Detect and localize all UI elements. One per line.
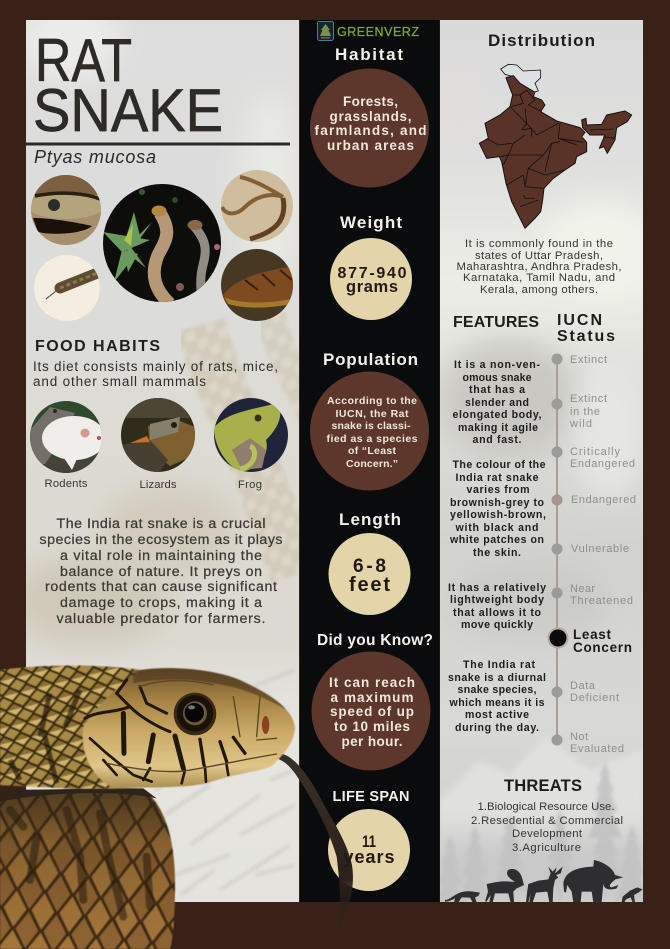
text: feature 2: varies from	[466, 484, 530, 496]
text: feature 4: which means it is	[448, 697, 545, 709]
text: feature 4: snake is a diurnal	[448, 672, 546, 684]
chart: IUCN status timeline: wild	[569, 418, 592, 430]
text: feature 4: snake species,	[458, 684, 537, 696]
head and neck	[0, 666, 295, 789]
text: diet description	[33, 359, 278, 389]
heading: food habits: FOOD HABITS	[35, 338, 160, 355]
photo: frog	[214, 398, 288, 472]
stat: habitat circle	[310, 68, 429, 188]
photo: lizard	[121, 398, 195, 472]
heading: IUCN status: IUCN	[557, 312, 602, 329]
map: state borders	[487, 90, 615, 207]
chart: IUCN status timeline: Near	[570, 583, 595, 595]
stat: population circle: snake is classi-	[332, 420, 411, 432]
text: feature 2: The colour of the	[452, 459, 546, 471]
text: distribution description: states of Uttar Pradesh,	[475, 250, 603, 262]
stat: habitat circle: farmlands, and	[314, 123, 426, 138]
head scale markings	[85, 680, 277, 783]
stat: did you know circle: speed of up	[330, 704, 414, 719]
text: feature 1: elongated body,	[452, 409, 542, 421]
title: SNAKE	[33, 77, 223, 144]
map region: unshaded north	[501, 64, 541, 92]
title: RAT	[35, 27, 132, 94]
text: feature 3: move quickly	[461, 619, 533, 631]
heading: features: FEATURES	[453, 314, 539, 331]
subtitle: scientific name: Ptyas mucosa	[34, 147, 156, 167]
icon: deer	[526, 867, 563, 902]
text: feature 1: making it agile	[458, 422, 538, 434]
map region: north-east states	[582, 111, 632, 153]
text: ecosystem role paragraph: valuable predator for farmers.	[56, 611, 266, 627]
text: feature 4: The India rat	[463, 659, 535, 671]
text: ecosystem role paragraph: a vital role in maintaining the	[60, 548, 262, 564]
text: diet description: and other small mammals	[33, 374, 206, 389]
text: feature 4	[448, 659, 546, 734]
stat: habitat circle: Forests,	[343, 94, 398, 109]
text: ecosystem role paragraph: The India rat snake is a crucial	[56, 516, 266, 532]
chart: IUCN status timeline: Extinct	[570, 393, 607, 405]
text: ecosystem role paragraph: damage to crops, making it a	[60, 595, 262, 611]
chart: IUCN status timeline: Critically	[570, 446, 620, 458]
text: distribution description: Kerala, among others.	[480, 284, 598, 296]
text: life span value: 11	[362, 832, 376, 851]
coiled body	[0, 787, 175, 949]
photo: snake on rock	[221, 170, 293, 242]
chart: IUCN status timeline: Deficient	[570, 692, 619, 704]
chart: IUCN status timeline: Not	[570, 731, 588, 743]
stat: habitat circle: urban areas	[327, 138, 414, 153]
photo: rodents	[30, 401, 106, 473]
text: feature 2: white patches on	[449, 534, 544, 546]
heading: IUCN status	[557, 312, 615, 345]
stat: length circle: 6-8	[353, 556, 386, 577]
stat: weight circle: grams	[346, 278, 398, 296]
text: feature 1: slender and	[465, 397, 529, 409]
text: feature 3: It has a relatively	[448, 582, 546, 594]
text: ecosystem role paragraph	[40, 516, 282, 627]
photo: snake tongue	[34, 255, 100, 321]
illustration: large foreground snake	[0, 666, 353, 949]
text: threats list: 2.Resedential & Commercial	[471, 815, 623, 827]
text: feature 2: brownish-grey to	[450, 497, 545, 509]
chart: IUCN status timeline	[548, 354, 636, 755]
panel: right column	[440, 20, 643, 902]
map: India distribution	[479, 64, 632, 228]
stat: length circle: feet	[349, 574, 390, 596]
label: lizards: Lizards	[140, 479, 177, 491]
eye	[174, 693, 216, 735]
stat: life span circle	[328, 809, 410, 891]
text: feature 4: most active	[465, 709, 529, 721]
text: ecosystem role paragraph: species in the ecosystem as it plays	[40, 532, 282, 548]
icon: wildlife silhouettes	[445, 860, 643, 902]
label: frog: Frog	[238, 479, 262, 491]
text: distribution description: It is commonly found in the	[465, 238, 613, 250]
text: feature 2: India rat snake	[456, 472, 539, 484]
text: life span value: years	[344, 847, 394, 867]
stat: population circle: IUCN, the Rat	[336, 408, 409, 420]
stat: did you know circle: per hour.	[342, 734, 402, 749]
icon: monkey	[622, 887, 643, 902]
stat: population circle: According to the	[327, 395, 417, 407]
chart: IUCN status timeline: Endangered	[571, 494, 636, 506]
text: distribution description: Maharashtra, Andhra Pradesh,	[456, 261, 622, 273]
heading: threats: THREATS	[504, 777, 582, 795]
text: threats list	[471, 801, 623, 854]
text: distribution description	[456, 238, 622, 296]
label: rodents: Rodents	[44, 478, 88, 490]
chart: IUCN status timeline: Data	[570, 680, 596, 692]
heading: length: Length	[339, 510, 401, 529]
text: feature 3: that allows it to	[453, 607, 542, 619]
heading: life span: LIFE SPAN	[332, 789, 410, 805]
text: feature 3	[448, 582, 546, 631]
stat: population circle	[310, 372, 429, 490]
chart: IUCN status timeline: Extinct	[570, 354, 607, 366]
stat: did you know circle: a maximum	[330, 690, 414, 705]
heading: did you know: Did you Know?	[317, 632, 433, 649]
photo: snake eye close-up	[28, 175, 104, 245]
chart: IUCN status timeline: Concern	[573, 640, 632, 655]
stat: did you know circle: It can reach	[329, 675, 415, 690]
logo: Greenverz: GREENVERZ	[337, 25, 419, 39]
text: feature 1: It is a non-ven-	[454, 359, 540, 371]
stat: population circle: Concern.”	[346, 458, 398, 470]
tongue	[277, 753, 353, 947]
icon: ibex	[485, 869, 524, 902]
text: threats list: 1.Biological Resource Use.	[478, 801, 614, 813]
chart: IUCN status timeline: Vulnerable	[571, 543, 629, 555]
heading: habitat: Habitat	[335, 45, 403, 64]
stat: weight circle	[330, 238, 412, 320]
text: feature 2: the skin.	[473, 547, 521, 559]
text: threats list: 3.Agriculture	[512, 842, 581, 854]
text: distribution description: Karnataka, Tamil Nadu, and	[463, 272, 615, 284]
text: ecosystem role paragraph: rodents that can cause significant	[45, 579, 277, 595]
text: ecosystem role paragraph: balance of nature. It preys on	[60, 564, 262, 580]
text: feature 4: during the day.	[455, 722, 539, 734]
text: feature 1: and fast.	[472, 434, 522, 446]
text: feature 2: yellowish-brown,	[450, 509, 546, 521]
panel: left column	[26, 20, 299, 902]
stat: did you know circle	[312, 652, 430, 770]
text: feature 1	[452, 359, 542, 446]
chart: IUCN status timeline: in the	[570, 406, 600, 418]
heading: population: Population	[323, 350, 418, 369]
title	[24, 27, 290, 146]
text: feature 3: lightweight body	[450, 594, 544, 606]
panel: center column	[300, 20, 440, 902]
heading: weight: Weight	[340, 213, 402, 232]
map region: mainland India	[479, 76, 587, 228]
text: feature 1: that has a	[469, 384, 525, 396]
icon: elephant	[563, 860, 623, 902]
chart: IUCN status timeline: Threatened	[570, 595, 633, 607]
nostril	[262, 716, 269, 734]
photo: brown snake head	[221, 249, 295, 321]
stat: weight circle: 877-940	[338, 265, 407, 282]
heading: distribution: Distribution	[488, 31, 595, 50]
text: feature 2: with black and	[454, 522, 538, 534]
text: life span value	[344, 832, 394, 867]
chart: IUCN status timeline: Evaluated	[570, 743, 624, 755]
text: feature 1: omous snake	[462, 372, 532, 384]
logo: Greenverz	[318, 22, 419, 40]
stat: length circle	[328, 533, 410, 615]
stat: habitat circle: grasslands,	[330, 109, 412, 124]
text: threats list: Development	[512, 828, 583, 840]
stat: population circle: of “Least	[348, 445, 396, 457]
stat: did you know circle: to 10 miles	[334, 719, 410, 734]
heading: IUCN status: Status	[557, 328, 615, 345]
chart: IUCN status timeline: Least	[573, 627, 612, 642]
text: diet description: Its diet consists mainly of rats, mice,	[33, 359, 278, 374]
chart: IUCN status timeline: Endangered	[570, 458, 635, 470]
icon: panther	[445, 891, 480, 902]
photo: two snakes among leaves	[103, 184, 221, 305]
stat: population circle: fied as a species	[326, 433, 418, 445]
text: feature 2	[449, 459, 546, 559]
